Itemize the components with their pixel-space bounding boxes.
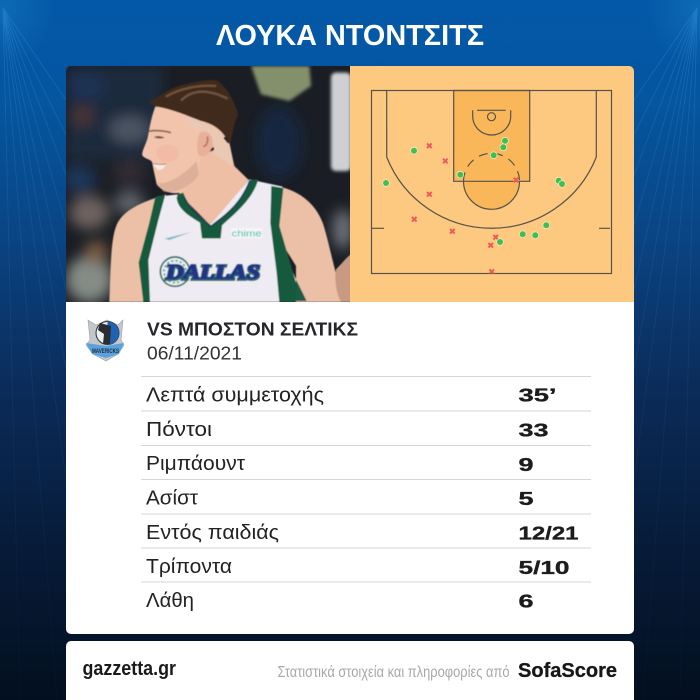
row: turnovers: 6 <box>518 591 534 611</box>
made shots <box>383 137 565 245</box>
row: assists: 5 <box>518 489 534 509</box>
stubble shadow <box>157 161 199 192</box>
ear <box>197 132 213 156</box>
row: assists: Ασίστ <box>146 488 198 510</box>
row: turnovers <box>146 590 534 612</box>
faded side of head <box>184 118 232 165</box>
chime logo: chime <box>232 229 262 239</box>
row: minutes: Λεπτά συμμετοχής <box>146 384 324 406</box>
panel: stats <box>66 302 634 634</box>
panel: footer <box>66 641 634 700</box>
row: assists <box>146 488 534 510</box>
brand: gazzetta.gr: gazzetta.gr <box>82 658 176 680</box>
stats table <box>141 376 591 612</box>
row: two pointers <box>146 522 578 544</box>
row: rebounds: 9 <box>518 455 534 475</box>
neck <box>179 143 249 226</box>
source note: Στατιστικά στοιχεία και πληροφορίες από <box>278 664 510 681</box>
cheek <box>158 146 178 161</box>
DALLAS crest <box>160 257 260 286</box>
swoosh <box>165 232 191 240</box>
row: rebounds <box>146 453 534 475</box>
icon: Dallas Mavericks logo <box>86 320 124 361</box>
row: points: Πόντοι <box>146 419 212 441</box>
icon: Dallas Mavericks logo: MAVERICKS <box>92 348 119 355</box>
hair <box>148 80 238 145</box>
row: turnovers: Λάθη <box>146 590 194 612</box>
court lines <box>372 90 612 274</box>
row: three pointers: 5/10 <box>518 558 570 578</box>
jersey <box>139 179 296 302</box>
row: minutes: 35’ <box>518 386 556 406</box>
row: two pointers: 12/21 <box>518 524 578 544</box>
mouth <box>153 164 166 170</box>
row: three pointers <box>146 556 570 578</box>
panel: player photo <box>63 66 353 303</box>
title: ΛΟΥΚΑ ΝΤΟΝΤΣΙΤΣ <box>216 20 484 52</box>
match date: 06/11/2021 <box>147 344 242 364</box>
DALLAS crest: DALLAS <box>165 262 260 284</box>
row: points <box>146 419 548 441</box>
match heading: VS ΜΠΟΣΤΟΝ ΣΕΛΤΙΚΣ <box>147 318 358 340</box>
row: two pointers: Εντός παιδιάς <box>146 522 279 544</box>
missed shots <box>412 143 518 274</box>
row: three pointers: Τρίποντα <box>146 556 232 578</box>
row: rebounds: Ριμπάουντ <box>146 453 245 475</box>
row: minutes <box>146 384 556 406</box>
face <box>142 107 226 193</box>
arms and torso skin <box>109 186 344 302</box>
panel: shot chart <box>350 66 634 302</box>
brow and eye <box>149 131 171 133</box>
row: points: 33 <box>518 421 548 441</box>
DALLAS crest: DALLAS <box>165 263 260 285</box>
brand: SofaScore: SofaScore <box>518 660 617 682</box>
